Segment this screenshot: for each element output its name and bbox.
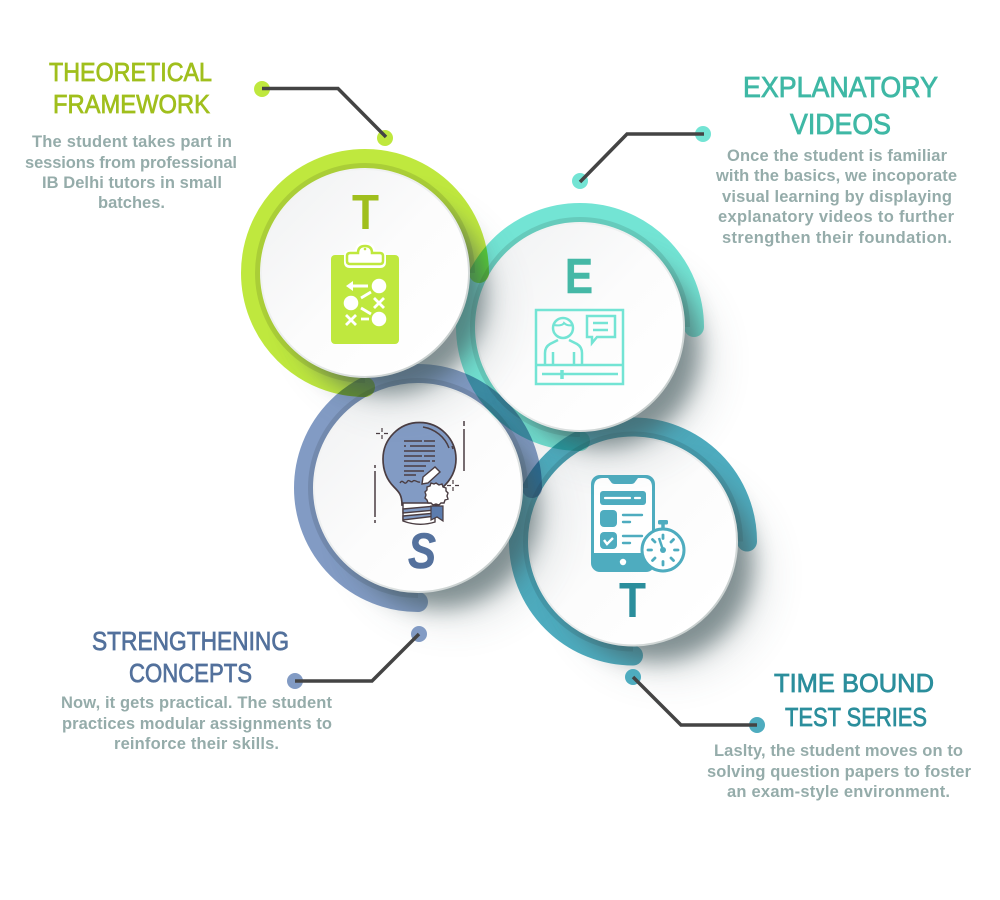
text: time bound test series description: an exam-style environment. [727,783,950,801]
text: explanatory videos description: explanatory videos to further [718,208,955,226]
text: explanatory videos description [715,147,957,247]
panel: theoretical framework circle [251,159,496,404]
ring: time bound [519,428,747,656]
ring: strengthening [304,374,532,602]
icon: light bulb with certificate [375,421,464,524]
text: theoretical framework description: sessions from professional [25,154,237,172]
letter T: T [619,574,646,628]
heading: theoretical framework [49,57,212,119]
text: theoretical framework description [25,133,237,212]
heading: explanatory videos [743,72,938,141]
heading: strengthening concepts [92,626,289,688]
panel: strengthening concepts circle [304,374,549,619]
text: explanatory videos description: visual learning by displaying [722,188,952,206]
heading: explanatory videos: VIDEOS [790,109,891,141]
heading: strengthening concepts: STRENGTHENING [92,626,289,656]
heading: theoretical framework: THEORETICAL [49,57,212,87]
heading: strengthening concepts: CONCEPTS [129,658,252,688]
ring: explanatory [466,213,694,441]
text: theoretical framework description: The student takes part in [32,133,232,151]
icon: clipboard strategy [331,242,399,344]
heading: explanatory videos: EXPLANATORY [743,72,938,104]
text: strengthening concepts description [61,694,332,753]
letter S: S [408,523,436,579]
text: explanatory videos description: strengthen their foundation. [722,229,952,247]
text: strengthening concepts description: Now, it gets practical. The student [61,694,332,712]
heading: time bound test series: TIME BOUND [774,668,934,698]
text: time bound test series description: solving question papers to foster [707,763,972,781]
connector: strengthening concepts [287,626,427,689]
connector: explanatory videos [572,126,711,189]
text: theoretical framework description: IB Delhi tutors in small [42,174,222,192]
heading: time bound test series: TEST SERIES [785,702,927,732]
heading: theoretical framework: FRAMEWORK [53,89,211,119]
text: strengthening concepts description: reinforce their skills. [114,735,279,753]
ring: theoretical [251,159,479,387]
panel: time bound circle [519,428,764,672]
text: time bound test series description: Laslty, the student moves on to [714,742,963,760]
panel: explanatory videos circle [466,213,711,458]
text: explanatory videos description: Once the student is familiar [727,147,948,165]
connector: theoretical framework [254,81,393,146]
letter E: E [565,250,593,304]
text: strengthening concepts description: practices modular assignments to [62,715,332,733]
letter T: T [352,186,379,240]
heading: time bound test series [774,668,934,732]
icon: phone with stopwatch [591,475,684,572]
text: time bound test series description [707,742,972,801]
icon: video lesson [536,310,623,384]
connector: time bound test series [625,669,765,733]
text: theoretical framework description: batches. [98,194,165,212]
text: explanatory videos description: with the basics, we incoporate [715,167,957,185]
